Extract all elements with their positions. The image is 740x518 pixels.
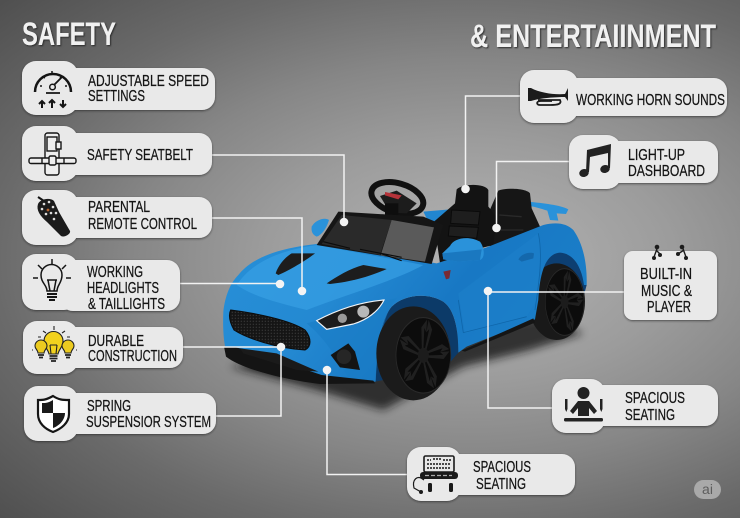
car body: [223, 223, 587, 383]
label: PLAYER: [647, 299, 691, 316]
car ground shadow: [230, 317, 583, 410]
label: HEADLIGHTS: [87, 280, 159, 297]
panel: parental remote control: [22, 190, 212, 245]
heading: safety: SAFETY: [22, 16, 116, 52]
label: WORKING: [87, 264, 143, 281]
icon: shield: [38, 396, 69, 432]
label: CONSTRUCTION: [88, 348, 177, 365]
icon: small speakers: [652, 245, 688, 260]
label: ADJUSTABLE SPEED: [88, 73, 209, 90]
headlight: [317, 300, 384, 329]
callout: bottom seating leader: [323, 366, 407, 474]
panel: working headlights: [22, 254, 180, 313]
icon: player with headphones: [414, 456, 458, 494]
spoiler: [528, 202, 568, 221]
label: [473, 459, 531, 493]
label: [625, 390, 685, 424]
callout: dashboard leader: [492, 162, 569, 232]
label: BUILT-IN: [640, 266, 692, 283]
panel: working horn sounds: [520, 70, 727, 123]
badge: [443, 270, 451, 279]
ai badge: [694, 480, 721, 499]
door panel: [458, 233, 540, 333]
icon: speedometer: [35, 71, 71, 108]
callout: construction leader: [183, 343, 285, 351]
label: [640, 266, 692, 316]
panel: spring suspension: [24, 386, 216, 441]
panel: adjustable speed: [22, 61, 215, 115]
label: PARENTAL: [88, 199, 150, 216]
callout: seatbelt leader: [212, 155, 348, 226]
front wheel arch: [376, 296, 458, 382]
label: [88, 73, 209, 105]
ride-on car: [223, 177, 588, 410]
door line and handle: [458, 233, 540, 333]
label: & TAILLIGHTS: [88, 296, 165, 313]
label: LIGHT-UP: [628, 147, 685, 164]
left mirror: [312, 219, 329, 237]
panel: spacious seating bottom: [407, 447, 575, 501]
grille: [229, 310, 310, 350]
icon: light bulb: [33, 259, 71, 300]
label: DURABLE: [88, 333, 144, 350]
front wheel: [376, 306, 455, 400]
callout: suspension leader: [216, 347, 281, 416]
label: SEATING: [476, 476, 526, 493]
label: [86, 398, 211, 431]
lower intake: [240, 348, 318, 372]
windshield: [317, 212, 443, 264]
callout: remote leader: [212, 218, 306, 295]
side sill: [462, 318, 535, 352]
right mirror: [442, 238, 484, 262]
icon: yellow bulbs: [32, 326, 77, 361]
label: [88, 199, 197, 233]
label: SETTINGS: [88, 88, 145, 105]
label: [88, 333, 177, 365]
blue cockpit rim: [423, 209, 450, 225]
label: SPRING: [87, 398, 131, 415]
label: [628, 147, 705, 180]
icon: seatbelt: [29, 133, 76, 175]
front seat: [434, 185, 497, 263]
front bumper lip: [224, 347, 375, 384]
label: SAFETY SEATBELT: [87, 147, 193, 164]
fog lamp: [331, 343, 360, 370]
hood vent right: [327, 265, 387, 284]
rear wheel: [528, 262, 588, 342]
label: [87, 264, 165, 313]
steering wheel: [368, 177, 427, 219]
hood highlight: [237, 245, 423, 310]
rear seat: [488, 189, 540, 248]
rear wheel arch: [538, 252, 587, 323]
hood vent left: [276, 253, 315, 275]
panel: light-up dashboard: [569, 135, 718, 189]
panel: spacious seating right: [552, 379, 718, 433]
ai badge: ai: [702, 481, 713, 497]
icon: remote: [37, 197, 70, 237]
panel: durable construction: [23, 321, 183, 374]
icon: music notes: [578, 144, 611, 178]
label: SPACIOUS: [473, 459, 531, 476]
label: SUSPENSIOR SYSTEM: [86, 414, 211, 431]
panel: safety seatbelt: [22, 126, 212, 181]
label: SPACIOUS: [625, 390, 685, 407]
label: MUSIC &: [641, 283, 692, 300]
label: DASHBOARD: [628, 163, 705, 180]
icon: seated person: [564, 387, 603, 422]
callout: seating leader: [488, 291, 552, 408]
label: REMOTE CONTROL: [88, 216, 197, 233]
label: SEATING: [625, 407, 675, 424]
icon: horn: [528, 88, 568, 105]
panel: built-in music player: [624, 245, 717, 320]
callout: horn leader: [461, 96, 520, 193]
lower shade: [307, 298, 397, 381]
callout: headlights leader: [180, 280, 284, 288]
callout: music leader: [484, 287, 624, 295]
